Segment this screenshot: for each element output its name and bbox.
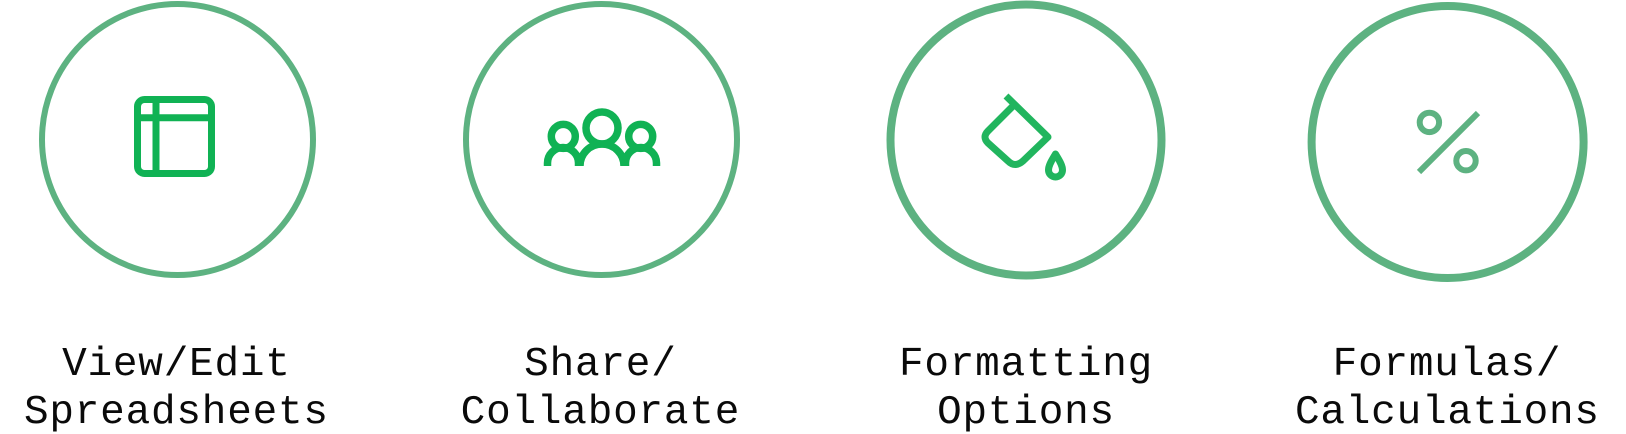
icon: spreadsheet table [137,99,212,174]
label: Share/Collaborate [461,342,740,434]
circle outline [42,4,313,275]
label: View/Edit Spreadsheets [24,342,329,434]
label: Formatting Options: Formatting [899,342,1153,388]
feature: formatting options [890,4,1162,434]
feature: share/collaborate [461,4,740,434]
circle outline [1312,6,1584,278]
label: Formulas/Calculations: Formulas/ [1333,342,1561,388]
label: Share/Collaborate: Share/ [524,342,677,388]
label: View/Edit Spreadsheets: View/Edit [62,342,291,388]
icon: paint bucket [985,96,1062,177]
icon: percent sign [1419,113,1478,172]
feature: view/edit spreadsheets [24,4,329,434]
feature: formulas/calculations [1295,6,1600,434]
circle outline [890,4,1162,276]
label: Formulas/Calculations [1295,342,1600,434]
icon: three people [547,112,656,166]
circle outline [466,4,737,275]
label: Formatting Options [899,342,1153,434]
